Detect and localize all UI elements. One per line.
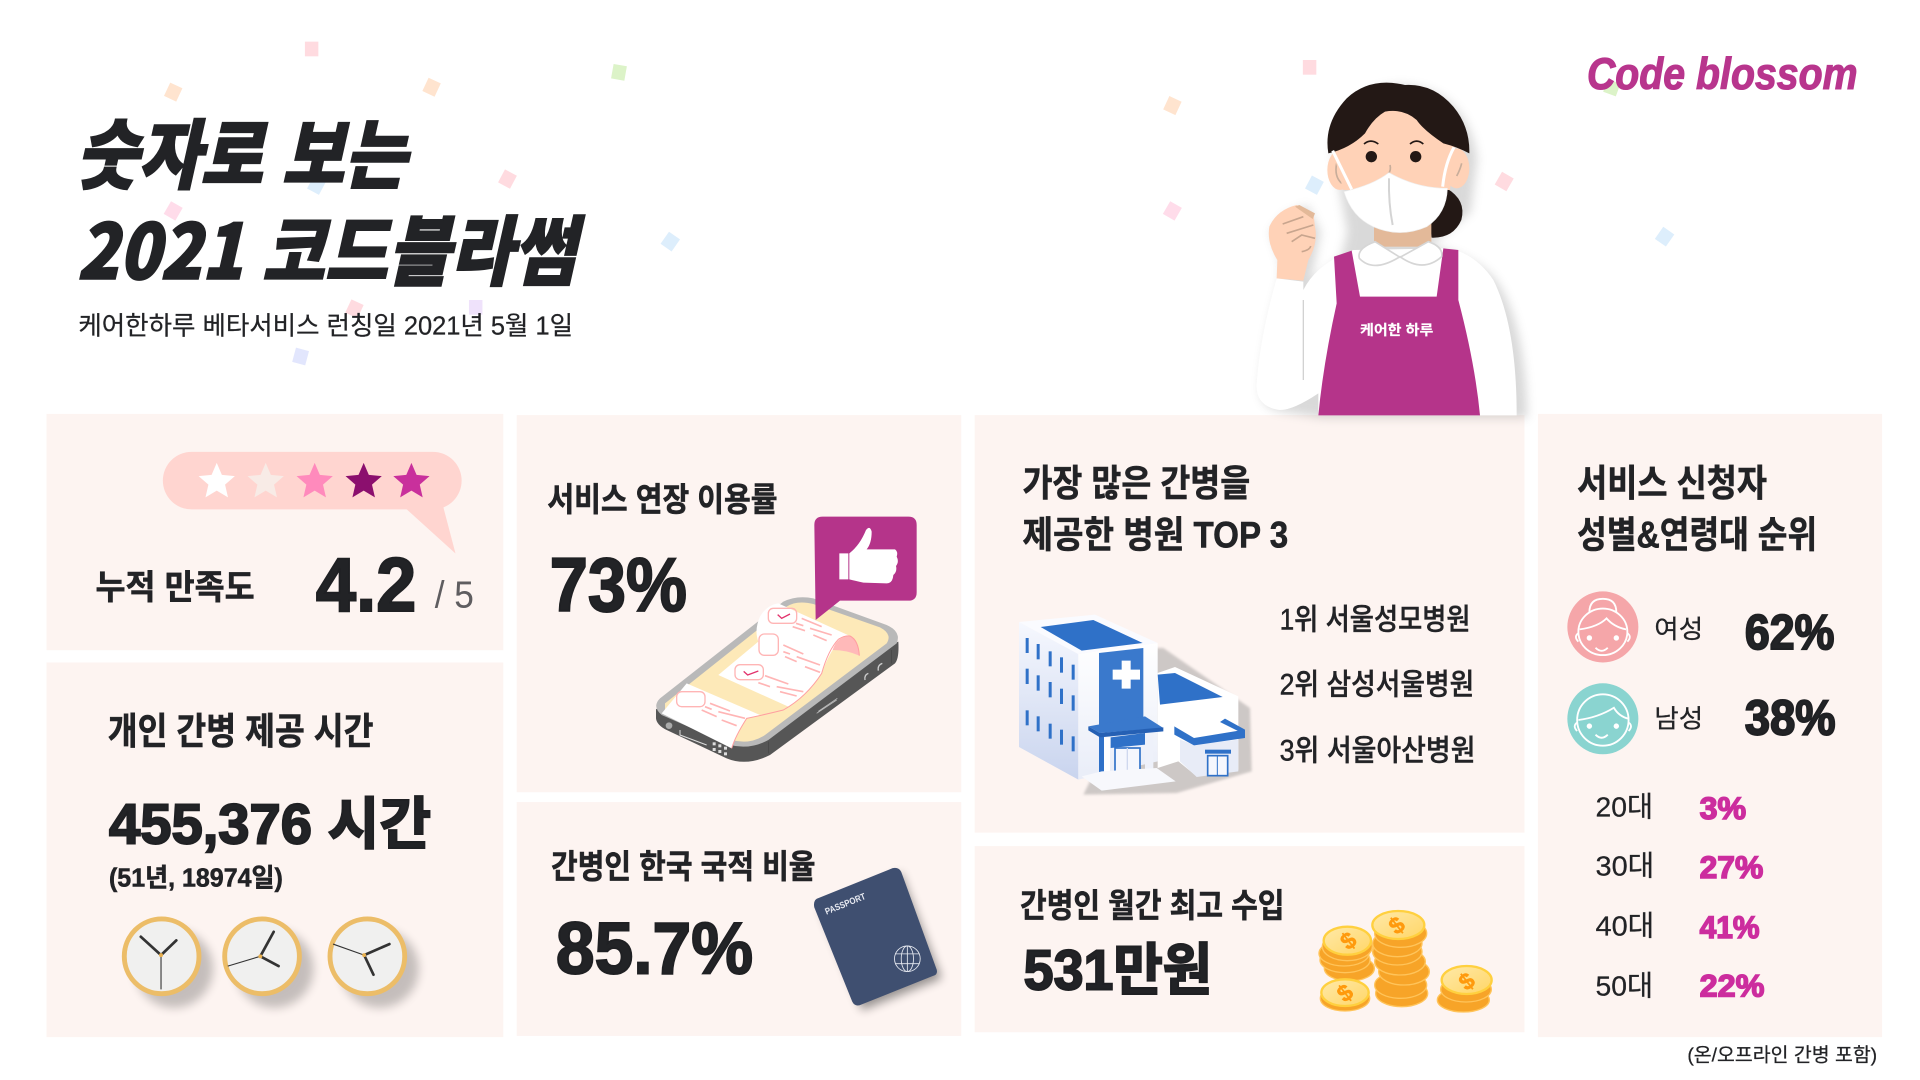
ears	[1327, 150, 1353, 190]
character: caregiver with apron	[1257, 83, 1527, 418]
ponytail	[1428, 188, 1462, 238]
eyes	[1366, 151, 1377, 162]
age table: 3%	[1700, 790, 1746, 826]
heading: 서비스 연장 이용률	[547, 482, 778, 519]
label: female: 여성	[1654, 615, 1703, 644]
heading: 개인 간병 제공 시간	[108, 711, 373, 752]
value: 4.2: 4.2	[316, 543, 416, 628]
value: 455,376 시간	[109, 793, 431, 856]
brand logo: Code blossom: Code blossom	[1587, 50, 1858, 99]
age table	[1596, 790, 1764, 1004]
body	[1257, 248, 1517, 415]
title: 2021 코드블라썸	[77, 191, 586, 301]
age table: 41%	[1700, 909, 1760, 945]
value: female: 62%	[1745, 606, 1834, 660]
icon: male face	[1567, 683, 1638, 754]
value: 531만원	[1024, 938, 1212, 1001]
eyebrows	[1364, 141, 1423, 144]
apron label: 케어한 하루	[1360, 322, 1433, 338]
panel: applicants	[1538, 414, 1882, 1037]
icon: passport	[814, 868, 942, 1010]
icon: passport: PASSPORT	[824, 891, 867, 917]
age table: 27%	[1700, 849, 1763, 885]
heading: 서비스 신청자	[1577, 463, 1767, 504]
mask	[1344, 173, 1447, 232]
subtitle: 케어한하루 베타서비스 런칭일 2021년 5월 1일	[78, 311, 573, 340]
hospital ranking list: 2위 삼성서울병원	[1280, 668, 1474, 701]
label: male: 남성	[1654, 704, 1703, 733]
heading: 간병인 월간 최고 수입	[1020, 888, 1284, 925]
sub value: (51년, 18974일)	[109, 864, 283, 893]
hand	[1269, 205, 1316, 281]
icon: hospital	[1019, 615, 1252, 795]
confetti	[164, 42, 1674, 365]
panel: service extension	[517, 415, 961, 792]
icon: thumbs up bubble	[814, 517, 917, 620]
value: male: 38%	[1745, 692, 1836, 746]
footnote: (온/오프라인 간병 포함)	[1687, 1045, 1877, 1067]
value: 85.7%	[556, 906, 753, 989]
heading: 간병인 한국 국적 비율	[551, 849, 816, 886]
label: satisfaction: 누적 만족도	[96, 569, 255, 607]
panel: top 3 hospitals	[975, 415, 1524, 833]
hospital ranking list: 1위 서울성모병원	[1280, 603, 1471, 636]
title: 숫자로 보는	[76, 94, 411, 204]
value suffix: / 5: / 5	[435, 574, 474, 616]
icon: clocks	[124, 919, 419, 1008]
face	[1333, 103, 1455, 190]
heading	[1022, 463, 1288, 555]
heading: 가장 많은 간병을	[1022, 463, 1250, 504]
value: 73%	[550, 543, 687, 628]
heading: 제공한 병원 TOP 3	[1022, 514, 1288, 555]
neck	[1374, 217, 1431, 247]
age table: 40대	[1596, 911, 1654, 942]
icon: coins	[1319, 911, 1492, 1012]
age table: 50대	[1596, 971, 1653, 1002]
icon: coins: $	[1454, 967, 1480, 996]
rating bubble with stars	[163, 452, 462, 553]
icon: coins: $	[1384, 911, 1410, 940]
collar	[1359, 242, 1442, 265]
icon: phone with checklist	[656, 597, 899, 762]
hair	[1327, 83, 1469, 153]
panel: satisfaction	[47, 414, 503, 650]
icon: coins: $	[1332, 979, 1358, 1007]
icon: coins: $	[1335, 926, 1361, 955]
hospital ranking list	[1280, 603, 1476, 767]
heading	[1577, 463, 1817, 555]
panel: care hours	[47, 662, 503, 1037]
age table: 30대	[1596, 851, 1654, 882]
heading: 성별&연령대 순위	[1577, 514, 1817, 555]
hospital ranking list: 3위 서울아산병원	[1280, 734, 1476, 767]
icon: female face	[1567, 591, 1638, 662]
panel: monthly income	[975, 846, 1524, 1032]
age table: 22%	[1700, 968, 1764, 1004]
age table: 20대	[1596, 792, 1653, 823]
title	[76, 94, 586, 301]
panel: nationality	[517, 802, 961, 1036]
